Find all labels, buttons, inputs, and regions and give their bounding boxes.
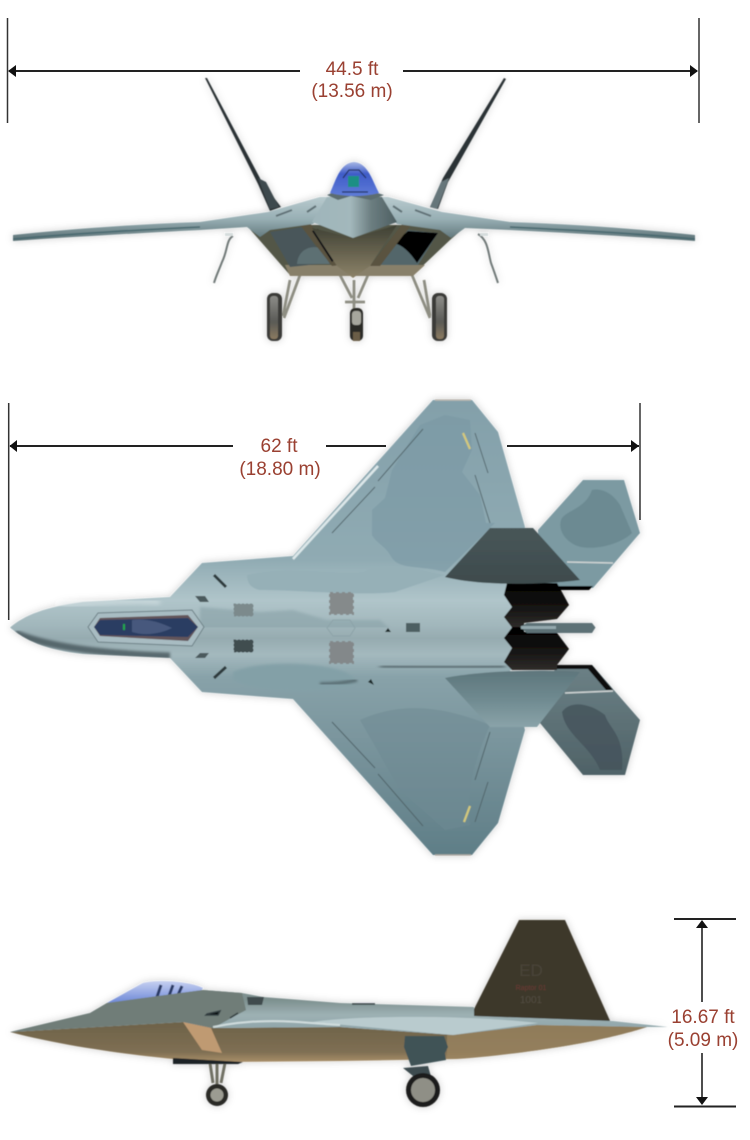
top view: lower tail fin — [540, 665, 640, 775]
side view aircraft — [10, 920, 668, 1107]
front view: nose — [312, 192, 397, 238]
dimension: wingspan 44.5 ft: 44.5 ft — [326, 59, 379, 80]
top view: lower fuselage and wing — [10, 628, 525, 855]
dimension: height 16.67 ft: (5.09 m) — [668, 1030, 738, 1051]
front view: wings — [13, 197, 695, 241]
front view: fuselage and intakes — [248, 223, 465, 278]
front view: wing pylons — [214, 233, 498, 283]
side view: tail fin: 1001 — [520, 995, 543, 1006]
dimension: height 16.67 ft — [668, 919, 738, 1106]
side view: upper fuselage and wing — [10, 990, 668, 1035]
dimension: length 62 ft — [9, 403, 640, 620]
dimension: height 16.67 ft: 16.67 ft — [671, 1007, 735, 1028]
front view: vertical tails — [205, 78, 506, 211]
side view: tail fin: Raptor 01 — [516, 985, 546, 992]
top view: exhaust nozzles — [500, 583, 596, 670]
top view: grills and vents — [195, 575, 420, 685]
front view aircraft — [13, 78, 695, 341]
side view: tail fin — [470, 920, 611, 1023]
dimension: wingspan 44.5 ft — [8, 18, 699, 123]
side view: canopy — [107, 981, 203, 1003]
dimension: wingspan 44.5 ft: (13.56 m) — [311, 81, 393, 102]
side view: tail fin: ED — [519, 961, 543, 980]
side view: landing gear — [206, 1062, 440, 1107]
top view: canopy — [88, 610, 204, 646]
top view aircraft — [10, 400, 640, 855]
top view: upper tail fin — [538, 480, 640, 590]
side view: lower fuselage — [10, 1022, 647, 1064]
front view: canopy — [330, 162, 379, 196]
side view: main gear door — [404, 1036, 448, 1066]
top view: upper fuselage and wing — [10, 400, 525, 653]
dimension: length 62 ft: 62 ft — [261, 436, 298, 457]
front view: landing gear — [267, 275, 447, 341]
dimension: length 62 ft: (18.80 m) — [239, 459, 321, 480]
top view: horizontal stabilizers — [445, 528, 580, 727]
